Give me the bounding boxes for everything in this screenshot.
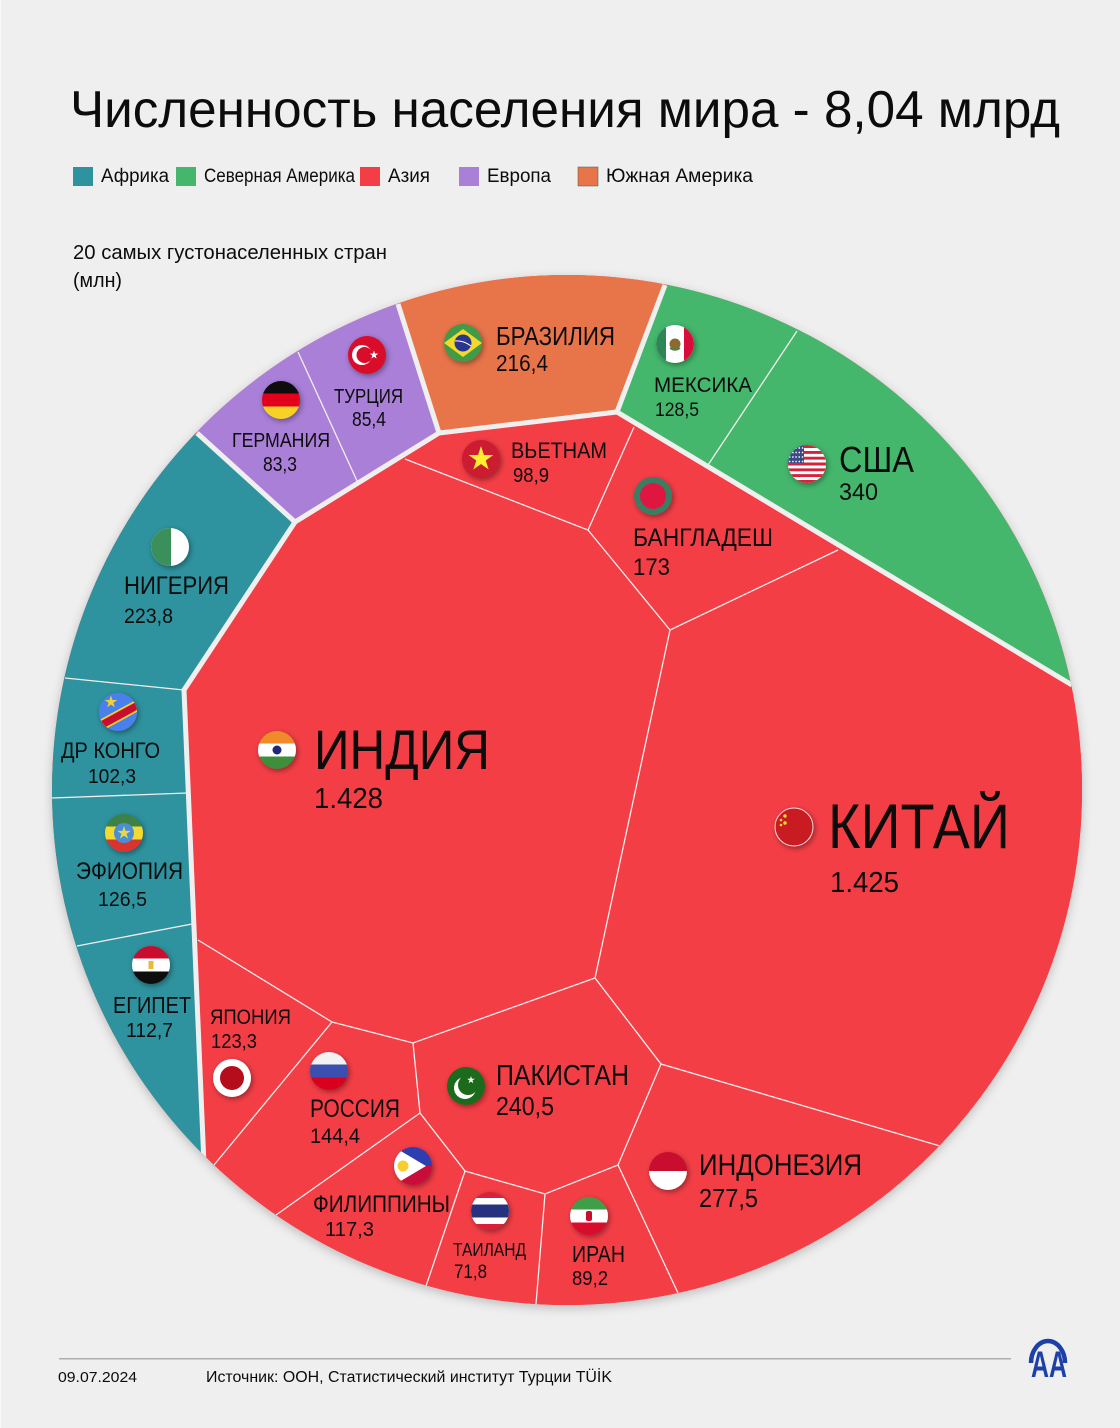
chart: circular voronoi of population bbox=[48, 274, 1086, 1312]
label bbox=[828, 791, 1010, 899]
label: 340 bbox=[839, 479, 878, 506]
label: БРАЗИЛИЯ bbox=[496, 321, 615, 351]
label bbox=[124, 572, 229, 628]
label bbox=[313, 1191, 450, 1241]
icon: flag of Japan bbox=[213, 1059, 251, 1097]
country: Эфиопия bbox=[76, 814, 183, 911]
label: 128,5 bbox=[655, 400, 699, 421]
label: 144,4 bbox=[310, 1125, 360, 1148]
icon: flag of Pakistan bbox=[447, 1067, 485, 1105]
label: 1.428 bbox=[314, 783, 383, 815]
legend bbox=[73, 166, 753, 187]
label: ЯПОНИЯ bbox=[210, 1006, 291, 1029]
label: ПАКИСТАН bbox=[496, 1060, 629, 1092]
legend: Африка bbox=[101, 166, 169, 187]
label bbox=[76, 858, 183, 911]
label: 1.425 bbox=[830, 867, 899, 899]
label bbox=[232, 430, 330, 476]
subtitle: (млн) bbox=[73, 270, 122, 292]
icon: flag of Vietnam bbox=[462, 440, 500, 478]
logo: AA bbox=[1031, 1341, 1067, 1385]
label bbox=[113, 992, 191, 1042]
label: ЕГИПЕТ bbox=[113, 992, 191, 1018]
country: Вьетнам bbox=[462, 438, 607, 487]
label: ФИЛИППИНЫ bbox=[313, 1191, 450, 1218]
icon: flag of USA bbox=[788, 445, 826, 483]
footer source: Источник: ООН, Статистический институт Турции TÜİK bbox=[206, 1368, 613, 1386]
label: 173 bbox=[633, 554, 670, 581]
label bbox=[839, 439, 914, 506]
icon: flag of Iran bbox=[570, 1197, 608, 1236]
icon: flag of Germany bbox=[262, 381, 300, 420]
label bbox=[334, 386, 403, 431]
icon: flag of DR Congo bbox=[96, 693, 140, 731]
label: ВЬЕТНАМ bbox=[511, 438, 607, 463]
label bbox=[572, 1241, 625, 1290]
icon: flag of Nigeria bbox=[151, 528, 189, 566]
label bbox=[61, 738, 160, 788]
footer rule bbox=[59, 1358, 1011, 1360]
icon: flag of China bbox=[775, 808, 813, 846]
icon: flag of Bangladesh bbox=[634, 477, 672, 515]
label: ГЕРМАНИЯ bbox=[232, 430, 330, 452]
icon: flag of Russia bbox=[310, 1052, 348, 1090]
label: ИРАН bbox=[572, 1241, 625, 1267]
panel: Asia bbox=[205, 686, 1082, 1305]
label bbox=[496, 321, 615, 376]
label: 102,3 bbox=[88, 766, 136, 788]
label: 216,4 bbox=[496, 350, 548, 376]
label: ДР КОНГО bbox=[61, 738, 160, 763]
label: ИНДОНЕЗИЯ bbox=[699, 1149, 862, 1182]
label bbox=[699, 1149, 862, 1213]
country: Россия bbox=[310, 1052, 400, 1148]
country: Египет bbox=[113, 946, 191, 1042]
label: РОССИЯ bbox=[310, 1095, 400, 1123]
icon: flag of Thailand bbox=[471, 1192, 509, 1230]
label: 277,5 bbox=[699, 1183, 758, 1213]
footer date: 09.07.2024 bbox=[58, 1369, 137, 1386]
label: 123,3 bbox=[211, 1031, 257, 1053]
panel: South America bbox=[398, 275, 665, 430]
label: ЭФИОПИЯ bbox=[76, 858, 183, 885]
country: Мексика bbox=[654, 325, 752, 421]
icon: flag of Turkey bbox=[348, 336, 386, 374]
label: КИТАЙ bbox=[828, 791, 1010, 862]
panel: North America bbox=[620, 284, 1071, 684]
country: Бангладеш bbox=[633, 477, 773, 581]
icon: flag of India bbox=[258, 731, 296, 770]
legend: Южная Америка bbox=[606, 166, 753, 187]
label bbox=[314, 718, 490, 815]
panel: Africa bbox=[52, 433, 292, 1156]
subtitle: 20 самых густонаселенных стран bbox=[73, 242, 387, 264]
label: 71,8 bbox=[454, 1262, 487, 1283]
legend: Азия bbox=[388, 166, 430, 187]
country: Нигерия bbox=[124, 528, 229, 628]
label: БАНГЛАДЕШ bbox=[633, 524, 773, 552]
icon: flag of Ethiopia bbox=[105, 814, 143, 852]
icon: flag of Philippines bbox=[394, 1147, 432, 1185]
label: 89,2 bbox=[572, 1268, 608, 1290]
icon: flag of Brazil bbox=[444, 324, 482, 362]
country: Индонезия bbox=[649, 1149, 862, 1213]
panel: Europe bbox=[197, 304, 436, 519]
label: ТАИЛАНД bbox=[453, 1240, 526, 1260]
label bbox=[210, 1006, 291, 1053]
label: США bbox=[839, 439, 914, 480]
label: НИГЕРИЯ bbox=[124, 572, 229, 600]
country: Германия bbox=[232, 381, 330, 476]
label: 112,7 bbox=[126, 1020, 173, 1042]
country: США bbox=[786, 444, 914, 500]
country: Таиланд bbox=[453, 1192, 526, 1283]
country: Бразилия bbox=[444, 321, 615, 376]
country: Китай bbox=[775, 791, 1010, 899]
icon: flag of Egypt bbox=[132, 946, 170, 984]
subtitle bbox=[73, 242, 387, 292]
label bbox=[654, 374, 752, 421]
country: Индия bbox=[258, 718, 490, 815]
label: ИНДИЯ bbox=[314, 718, 490, 781]
label: 117,3 bbox=[325, 1219, 374, 1241]
country: ДР Конго bbox=[61, 693, 160, 788]
label: МЕКСИКА bbox=[654, 374, 752, 397]
label: 240,5 bbox=[496, 1091, 554, 1121]
label: 98,9 bbox=[513, 465, 549, 487]
label: 126,5 bbox=[98, 889, 147, 911]
legend: Европа bbox=[487, 166, 551, 187]
label bbox=[633, 524, 773, 581]
label: 223,8 bbox=[124, 605, 173, 628]
logo: AA: AA bbox=[1031, 1344, 1067, 1385]
icon: flag of Indonesia bbox=[649, 1152, 687, 1190]
title: Численность населения мира - 8,04 млрд bbox=[70, 81, 1060, 139]
country: Пакистан bbox=[445, 1064, 627, 1118]
label bbox=[511, 438, 607, 487]
icon: flag of Mexico bbox=[656, 325, 694, 363]
country: Иран bbox=[570, 1197, 625, 1290]
country: Турция bbox=[334, 336, 403, 431]
label bbox=[310, 1095, 400, 1148]
country: Япония bbox=[210, 1006, 291, 1097]
country: Филиппины bbox=[313, 1147, 450, 1241]
label: 85,4 bbox=[352, 409, 386, 431]
label: 83,3 bbox=[263, 454, 297, 476]
label bbox=[496, 1060, 629, 1121]
label bbox=[453, 1240, 526, 1283]
legend: Северная Америка bbox=[204, 166, 355, 187]
label: ТУРЦИЯ bbox=[334, 386, 403, 408]
